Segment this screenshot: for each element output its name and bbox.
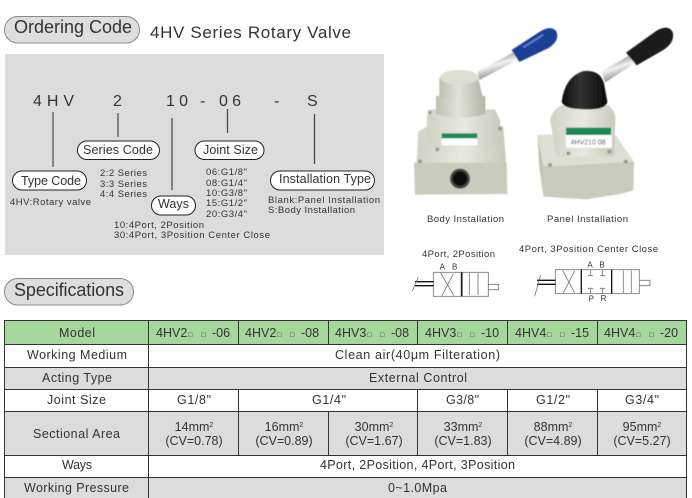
label: Type Code: Type Code [21,174,81,188]
joint size values: G1/2" [536,393,570,407]
diagram: 4 port 3 position symbol [535,260,650,304]
row labels: Working Medium [27,348,127,362]
text: joint size options: 10:G3/8" [206,188,247,199]
model codes: □ [636,332,641,339]
model codes: -15 [571,326,589,340]
sectional area values: 95mm [623,420,657,434]
sectional area values: (CV=0.89) [255,434,313,448]
model codes: -08 [391,326,409,340]
sectional area values: (CV=1.83) [434,434,492,448]
model codes: 4HV2 [156,326,187,340]
text: joint size options: 08:G1/4" [206,178,247,189]
row labels: Acting Type [42,371,112,385]
label: Joint Size: Joint Size [203,143,258,157]
connector lines [53,109,314,190]
sectional area values: 16mm [265,420,299,434]
text: joint size options [206,167,247,220]
spanning values: 4Port, 2Position, 4Port, 3Position [320,458,515,472]
label: Series Code [78,141,160,160]
row labels [24,326,129,495]
photo: body installation valve [414,28,557,195]
text: rotary valve: 4HV:Rotary valve [10,197,91,208]
code string: 2 [113,93,122,110]
model codes: -10 [481,326,499,340]
model codes: -08 [301,326,319,340]
model codes: 4HV3 [425,326,456,340]
sectional area values [165,420,671,448]
diagram: 4 port 3 position symbol: B [599,260,605,269]
model codes: 4HV4 [515,326,546,340]
model codes: -06 [212,326,230,340]
row labels: Ways [62,458,92,472]
caption: Body Installation: Body Installation [427,214,504,225]
model codes: □ [380,332,385,339]
code string: 06 [219,93,241,110]
caption: Panel Installation: Panel Installation [547,214,628,225]
model codes: □ [188,332,193,339]
panel: ordering code breakdown [5,54,384,255]
row labels: Model [59,326,95,340]
spanning values [320,348,515,495]
photo: panel installation valve: 4HV210 08 [571,140,606,147]
model codes: -20 [660,326,678,340]
heading: Ordering Code: Ordering Code [14,17,132,37]
model codes: □ [201,332,206,339]
model codes: □ [547,332,552,339]
text: joint size options: 06:G1/8" [206,167,247,178]
sectional area values: 2 [478,422,482,429]
model codes: □ [457,332,462,339]
joint size values: G3/4" [625,393,659,407]
diagram: 4 port 2 position symbol [412,263,499,296]
text: series options [100,168,147,200]
code string: 4HV [33,93,74,110]
code string [33,93,318,110]
model codes [156,326,678,340]
label: Installation Type: Installation Type [279,172,371,186]
diagram: 4 port 2 position symbol: A [440,263,446,272]
row backgrounds [4,320,687,498]
sectional area values: 88mm [534,420,568,434]
sectional area values: (CV=0.78) [165,434,223,448]
heading: Ordering Code [4,16,140,43]
model codes: 4HV4 [604,326,635,340]
row labels: Joint Size [47,393,106,407]
grid lines [4,320,687,498]
diagram: 4 port 3 position symbol: R [601,294,607,303]
table: specifications [4,320,687,498]
sectional area values: (CV=1.67) [345,434,403,448]
text: installation options [268,195,380,216]
diagram: 4 port 3 position symbol: P [589,295,594,304]
text: series options: 2:2 Series [100,168,147,179]
sectional area values: (CV=5.27) [613,434,671,448]
sectional area values: 2 [657,422,661,429]
caption: 4Port, 3Position Center Close: 4Port, 3Position Center Close [519,244,658,255]
label: Installation Type [270,171,374,190]
model codes: □ [560,332,565,339]
spanning values: 0~1.0Mpa [388,481,447,495]
label: Ways: Ways [158,197,189,211]
model codes: 4HV3 [335,326,366,340]
title: 4HV Series Rotary Valve: 4HV Series Rotary Valve [150,23,351,42]
label: Ways [152,196,196,215]
text: joint size options: 20:G3/4" [206,209,247,220]
label: Series Code: Series Code [83,143,153,157]
diagram: 4 port 2 position symbol: B [452,263,457,272]
photo: panel installation valve [537,28,673,199]
joint size values: G3/8" [446,393,479,407]
text: ways options: 10:4Port, 2Position [114,220,204,231]
code string: - [200,93,205,110]
model codes: □ [470,332,475,339]
text: ways options: 30:4Port, 3Position Center Close [114,230,270,241]
sectional area values: (CV=4.89) [524,434,582,448]
sectional area values: 2 [209,422,213,429]
model codes: □ [649,332,654,339]
sectional area values: 30mm [355,420,389,434]
model codes: □ [367,332,372,339]
caption: 4Port, 2Position: 4Port, 2Position [422,249,495,260]
row labels: Working Pressure [24,481,129,495]
joint size values [177,393,659,407]
spanning values: Clean air(40μm Filteration) [335,348,500,362]
model codes: □ [277,332,282,339]
text: installation options: S:Body Installation [268,205,355,216]
diagram: 4 port 3 position symbol: A [587,260,593,269]
sectional area values: 14mm [175,420,209,434]
code string: S [307,93,318,110]
code string: - [274,93,279,110]
text: installation options: Blank:Panel Installation [268,195,380,206]
heading: Specifications: Specifications [14,280,124,300]
text: ways options [114,220,270,241]
row labels: Sectional Area [33,427,120,441]
model codes: 4HV2 [245,326,276,340]
heading: Specifications [4,278,134,305]
sectional area values: 33mm [444,420,478,434]
text: series options: 4:4 Series [100,189,147,200]
label: Joint Size [195,141,264,160]
spanning values: External Control [369,371,467,385]
label: Type Code [12,171,86,190]
sectional area values: 2 [568,422,572,429]
model codes: □ [290,332,295,339]
joint size values: G1/8" [177,393,211,407]
joint size values: G1/4" [312,393,346,407]
text: joint size options: 15:G1/2" [206,198,247,209]
text: series options: 3:3 Series [100,179,147,190]
sectional area values: 2 [299,422,303,429]
sectional area values: 2 [389,422,393,429]
code string: 10 [166,93,188,110]
